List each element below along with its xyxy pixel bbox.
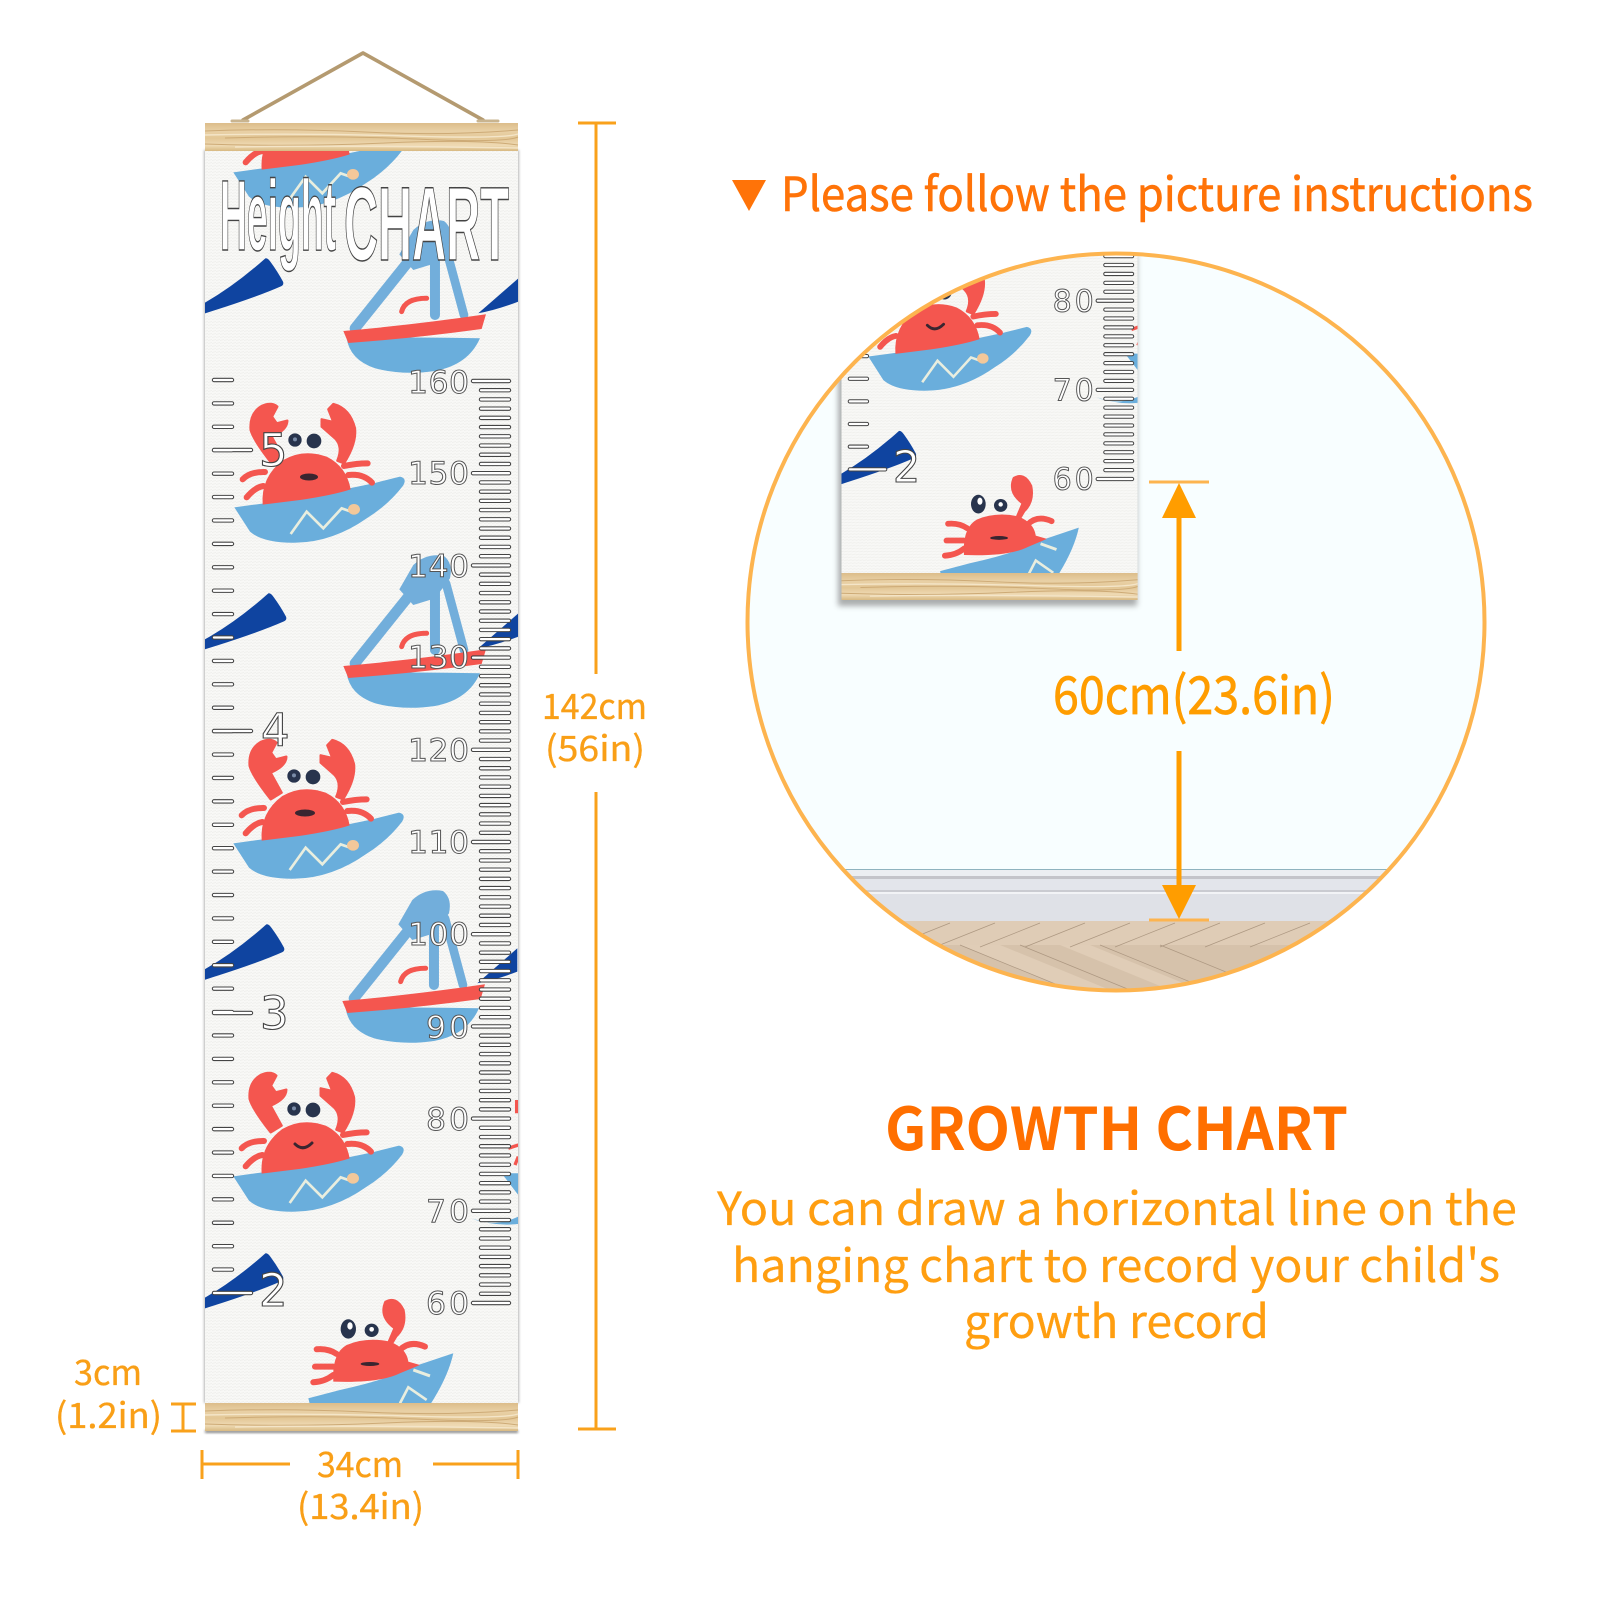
centimetre numbers: 130 <box>408 640 469 676</box>
feet numbers: 5 <box>259 424 288 477</box>
description text <box>716 1173 1517 1352</box>
description text: hanging chart to record your child's <box>732 1230 1500 1296</box>
instruction heading: Please follow the picture instructions <box>781 156 1533 225</box>
centimetre numbers: 140 <box>408 549 469 585</box>
feet numbers: 3 <box>260 987 289 1040</box>
chart title: Height <box>220 160 336 272</box>
top wooden bar <box>205 123 518 151</box>
centimetre numbers: 150 <box>408 456 469 492</box>
panel: hanging height chart <box>202 53 519 1433</box>
description text: growth record <box>964 1286 1269 1352</box>
dimension: total height 142cm <box>542 123 647 1429</box>
centimetre numbers: 90 <box>426 1010 469 1046</box>
inset: bottom of chart on the wall: 70 <box>1053 374 1094 409</box>
heading: growth chart: GROWTH CHART <box>885 1082 1348 1167</box>
wall background <box>748 254 1484 990</box>
dimension: width 34cm: 34cm <box>317 1437 403 1488</box>
centimetre numbers: 120 <box>408 733 469 769</box>
centimetre numbers: 70 <box>426 1194 469 1230</box>
dimension: bar height 3cm: 3cm <box>74 1345 142 1396</box>
dimension: width 34cm: (13.4in) <box>297 1479 424 1530</box>
dimension: bar height 3cm <box>55 1345 196 1439</box>
centimetre numbers <box>408 365 469 1322</box>
bottom wooden bar <box>205 1403 518 1433</box>
dimension: width 34cm <box>202 1437 518 1530</box>
panel: circular installation diagram <box>746 252 1486 992</box>
centimetre numbers: 100 <box>408 917 469 953</box>
canvas with illustrations <box>202 69 519 1405</box>
inset: bottom of chart on the wall: 60 <box>1053 462 1094 498</box>
circle outline <box>748 254 1484 990</box>
feet numbers: 2 <box>259 1264 288 1317</box>
dimension: total height 142cm: (56in) <box>545 721 645 772</box>
inset: bottom of chart on the wall <box>834 256 1140 610</box>
text: CHART <box>344 166 509 283</box>
measurement label: 60cm(23.6in) <box>1053 654 1335 729</box>
dimension: bar height 3cm: (1.2in) <box>55 1388 162 1439</box>
dimension: total height 142cm: 142cm <box>542 679 647 730</box>
hanging string <box>232 53 498 121</box>
ruler tick marks <box>214 380 509 1303</box>
arrow: 60cm measurement <box>1149 482 1209 920</box>
centimetre numbers: 160 <box>408 365 469 401</box>
inset: bottom of chart on the wall: 2 <box>893 443 920 493</box>
description text: You can draw a horizontal line on the <box>716 1173 1517 1239</box>
centimetre numbers: 60 <box>426 1286 469 1322</box>
feet numbers: 4 <box>261 704 290 757</box>
centimetre numbers: 80 <box>426 1102 469 1138</box>
inset: bottom of chart on the wall: 80 <box>1053 285 1094 320</box>
centimetre numbers: 110 <box>408 825 469 861</box>
feet numbers <box>259 424 290 1317</box>
skirting board and wooden floor <box>845 869 1387 988</box>
